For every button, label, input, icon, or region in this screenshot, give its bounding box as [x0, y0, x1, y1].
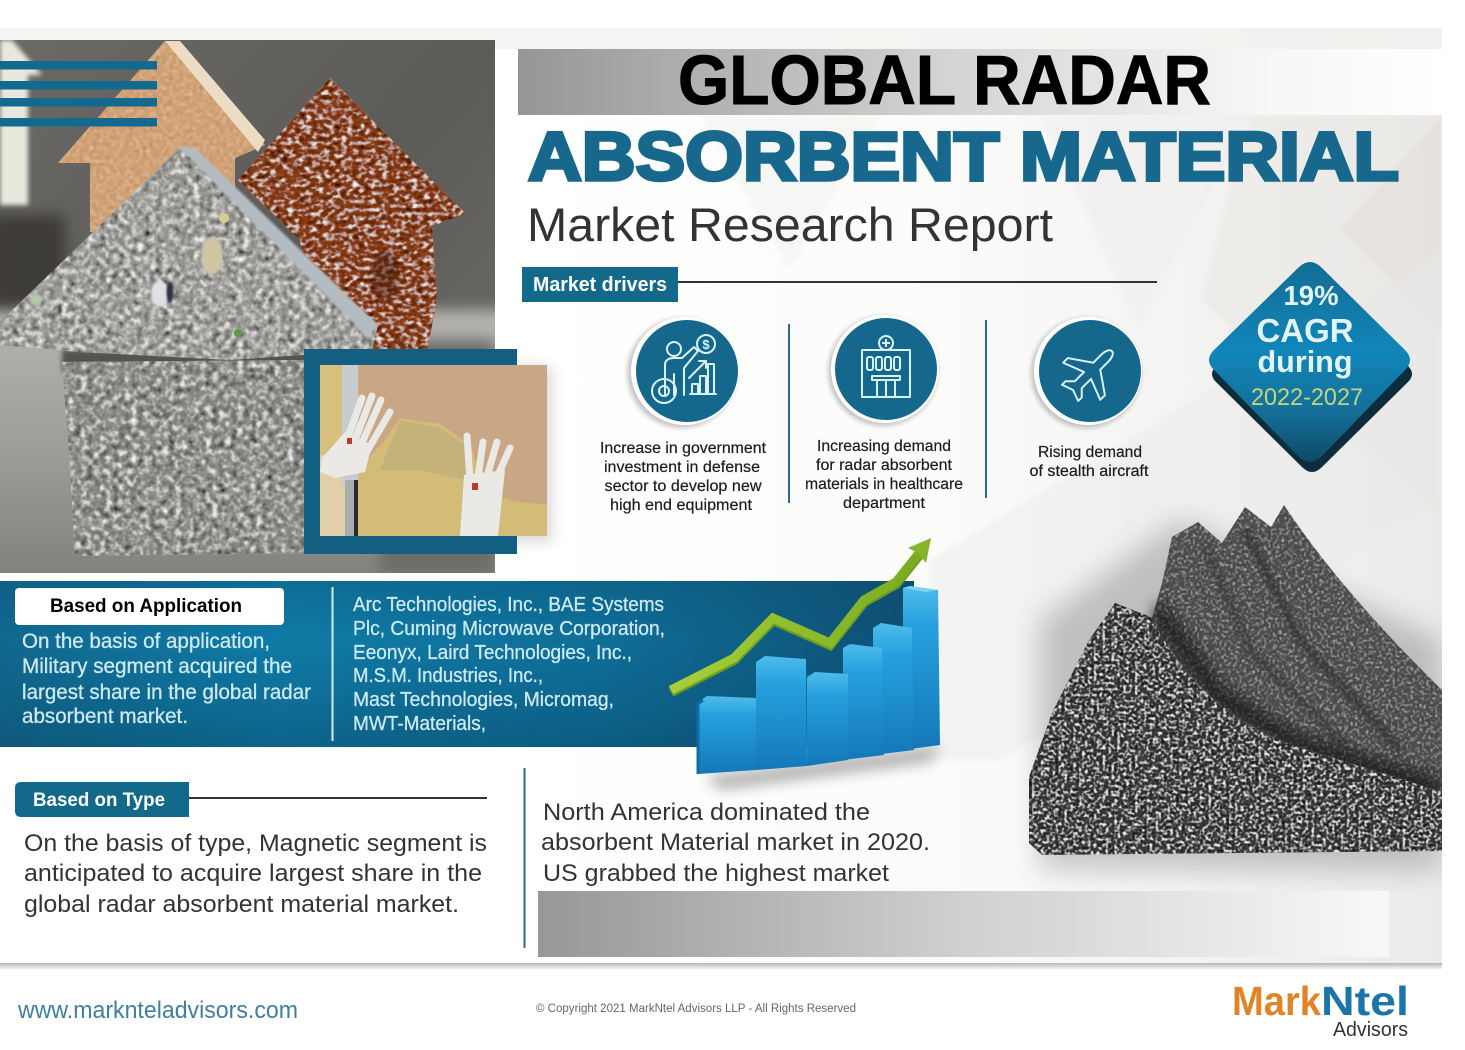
- driver 1 text: Increase in government: [600, 440, 767, 457]
- driver 1 text: investment in defense: [604, 459, 760, 476]
- application text: absorbent market.: [22, 705, 188, 728]
- heading: market drivers: [522, 267, 1157, 302]
- CAGR diamond badge: [1209, 262, 1412, 472]
- CAGR diamond badge: CAGR: [1256, 312, 1354, 349]
- growth arrow: [671, 538, 931, 692]
- inset image: hands with glass wool: [320, 365, 547, 536]
- teal frame: [304, 349, 517, 554]
- grey cellulose house roof: [0, 146, 378, 360]
- icon: hospital: [828, 315, 939, 426]
- company list: Eeonyx, Laird Technologies, Inc.,: [353, 642, 632, 664]
- label: based on application: [15, 588, 284, 625]
- application text: [22, 630, 311, 728]
- title: absorbent material: ABSORBENT MATERIAL: [528, 118, 1399, 195]
- type text: global radar absorbent material market.: [24, 891, 459, 918]
- CAGR diamond badge: 19%: [1284, 280, 1339, 311]
- driver 3 text: of stealth aircraft: [1030, 463, 1149, 480]
- company list: Arc Technologies, Inc., BAE Systems: [353, 594, 664, 616]
- copyright: © Copyright 2021 MarkNtel Advisors LLP - All Rights Reserved: [536, 1003, 856, 1015]
- company list: MWT-Materials,: [353, 713, 486, 735]
- region text: US grabbed the highest market: [543, 860, 889, 887]
- driver 3 text: [1030, 444, 1149, 480]
- photo: insulation material houses: [0, 40, 515, 590]
- foam sheet photo: [1029, 505, 1442, 870]
- company list: Mast Technologies, Micromag,: [353, 689, 614, 711]
- icon: investment person: [627, 317, 739, 428]
- logo: Advisors: [1333, 1019, 1408, 1041]
- region text: absorbent Material market in 2020.: [541, 829, 930, 856]
- divider 2: [985, 320, 987, 498]
- tan fibreboard house: [58, 41, 265, 232]
- inset photo with frame: [304, 349, 552, 554]
- application and companies banner: [0, 581, 914, 747]
- heading: market drivers: Market drivers: [533, 274, 667, 296]
- type text: On the basis of type, Magnetic segment is: [24, 830, 487, 857]
- region text: [541, 799, 930, 887]
- driver 1 text: high end equipment: [610, 497, 753, 514]
- driver 3 text: Rising demand: [1038, 444, 1142, 461]
- rust coconut fibre house: [238, 78, 466, 362]
- application text: largest share in the global radar: [22, 681, 311, 704]
- driver 2 text: department: [843, 495, 926, 512]
- front foam layer: [1029, 603, 1442, 855]
- CAGR diamond badge: during: [1258, 344, 1352, 379]
- decorative stripes icon: [0, 61, 157, 126]
- company list: [353, 594, 665, 735]
- grey cellulose house body: [62, 360, 305, 556]
- logo: Ntel: [1321, 978, 1409, 1024]
- redaction band: [538, 891, 1389, 957]
- driver 1 text: [600, 440, 767, 514]
- driver 1 text: sector to develop new: [604, 478, 762, 495]
- title band: [518, 41, 1442, 119]
- website: www.marknteladvisors.com: [17, 997, 298, 1024]
- heading: based on type: [15, 782, 487, 817]
- icon: investment person: $: [702, 337, 710, 352]
- driver 2 text: Increasing demand: [817, 438, 951, 455]
- type text: [24, 830, 487, 918]
- driver 2 text: for radar absorbent: [816, 457, 953, 474]
- label: based on application: Based on Application: [50, 595, 242, 617]
- region text: North America dominated the: [543, 799, 870, 826]
- divider 3: [524, 768, 526, 948]
- blurred white house: [0, 40, 42, 205]
- application text: On the basis of application,: [22, 630, 270, 653]
- type text: anticipated to acquire largest share in the: [24, 860, 482, 887]
- driver 1: government investment: [600, 317, 767, 514]
- driver 2: healthcare demand: [805, 315, 963, 512]
- inset shadow: [330, 366, 552, 542]
- heading: based on type: Based on Type: [33, 790, 165, 811]
- fold shadow: [1151, 600, 1442, 800]
- company list: M.S.M. Industries, Inc.,: [353, 665, 543, 687]
- subtitle: Market Research Report: [527, 198, 1053, 251]
- logo: Mark: [1232, 978, 1321, 1024]
- logo: [1232, 978, 1409, 1041]
- title: global radar: GLOBAL RADAR: [678, 41, 1211, 119]
- company list: Plc, Cuming Microwave Corporation,: [353, 618, 665, 640]
- driver 2 text: [805, 438, 963, 512]
- back foam layers: [1150, 505, 1442, 810]
- driver 3: stealth aircraft: [1030, 317, 1149, 480]
- shadow under roof: [62, 350, 317, 372]
- divider 1: [788, 324, 790, 503]
- application text: Military segment acquired the: [22, 655, 292, 678]
- driver 2 text: materials in healthcare: [805, 476, 963, 493]
- footer: [0, 963, 1442, 1041]
- growth bar chart with arrow: [671, 538, 940, 790]
- icon: airplane: [1031, 317, 1142, 428]
- CAGR diamond badge: 2022-2027: [1251, 384, 1363, 411]
